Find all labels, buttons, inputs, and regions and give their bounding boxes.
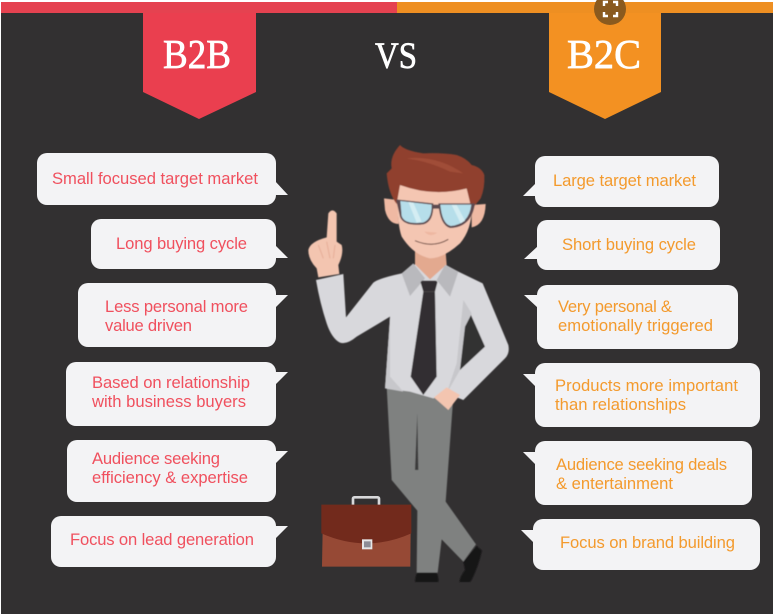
callout: very personal: emotionally triggered [558,316,713,335]
callout: audience seeking deals: Audience seeking deals [556,455,727,474]
callout: long buying cycle [91,219,288,269]
ears [384,198,399,224]
panel: B2B traits [37,153,288,567]
callout: products more important [523,363,760,427]
callout: audience seeking efficiency: efficiency & expertise [92,468,248,487]
callout: based on relationship: Based on relationship [92,373,250,392]
panel: B2C traits [521,156,760,570]
icon: fullscreen button [594,0,626,25]
callout: very personal [524,285,738,349]
heading: VS: VS [375,36,417,77]
illustration: businessman [308,145,509,582]
banner: B2C: B2C [567,31,641,77]
callout: less personal: value driven [105,316,192,335]
callout: large target market: Large target market [553,171,696,190]
hand pointing [308,210,342,277]
callout: audience seeking deals: & entertainment [556,474,673,493]
tie [421,281,437,292]
callout: small focused target market: Small focused target market [52,169,258,188]
banner: B2B [143,13,256,119]
callout: brand building: Focus on brand building [560,533,735,552]
callout: products more important: Products more important [555,376,738,395]
callout: products more important: than relationships [555,395,686,414]
top bar: B2C [397,2,773,13]
callout: long buying cycle: Long buying cycle [116,234,247,253]
callout: less personal [78,283,288,347]
callout: less personal: Less personal more [105,297,248,316]
callout: lead generation [51,516,288,567]
face [397,185,472,258]
callout: based on relationship [66,362,288,426]
callout: large target market [523,156,719,207]
top bar: B2B [1,2,397,13]
collar [402,263,425,296]
legs and shoes [387,387,482,582]
banner: B2B: B2B [163,31,231,77]
banner: B2C [549,13,661,119]
callout: lead generation: Focus on lead generation [70,530,254,549]
callout: short buying cycle [524,220,720,270]
neck [415,243,447,282]
upper body [308,145,509,400]
callout: audience seeking efficiency [67,440,288,502]
shirt [316,264,509,400]
hand in pocket [434,387,460,410]
callout: short buying cycle: Short buying cycle [562,235,696,254]
callout: audience seeking deals [523,441,752,505]
callout: small focused target market [37,153,288,205]
hair [387,145,484,209]
callout: based on relationship: with business buyers [91,392,246,411]
nose and mouth [424,232,437,235]
glasses [396,199,475,228]
callout: audience seeking efficiency: Audience seeking [92,449,220,468]
icon: briefcase [321,497,411,567]
callout: brand building [521,519,760,570]
callout: very personal: Very personal & [558,297,672,316]
